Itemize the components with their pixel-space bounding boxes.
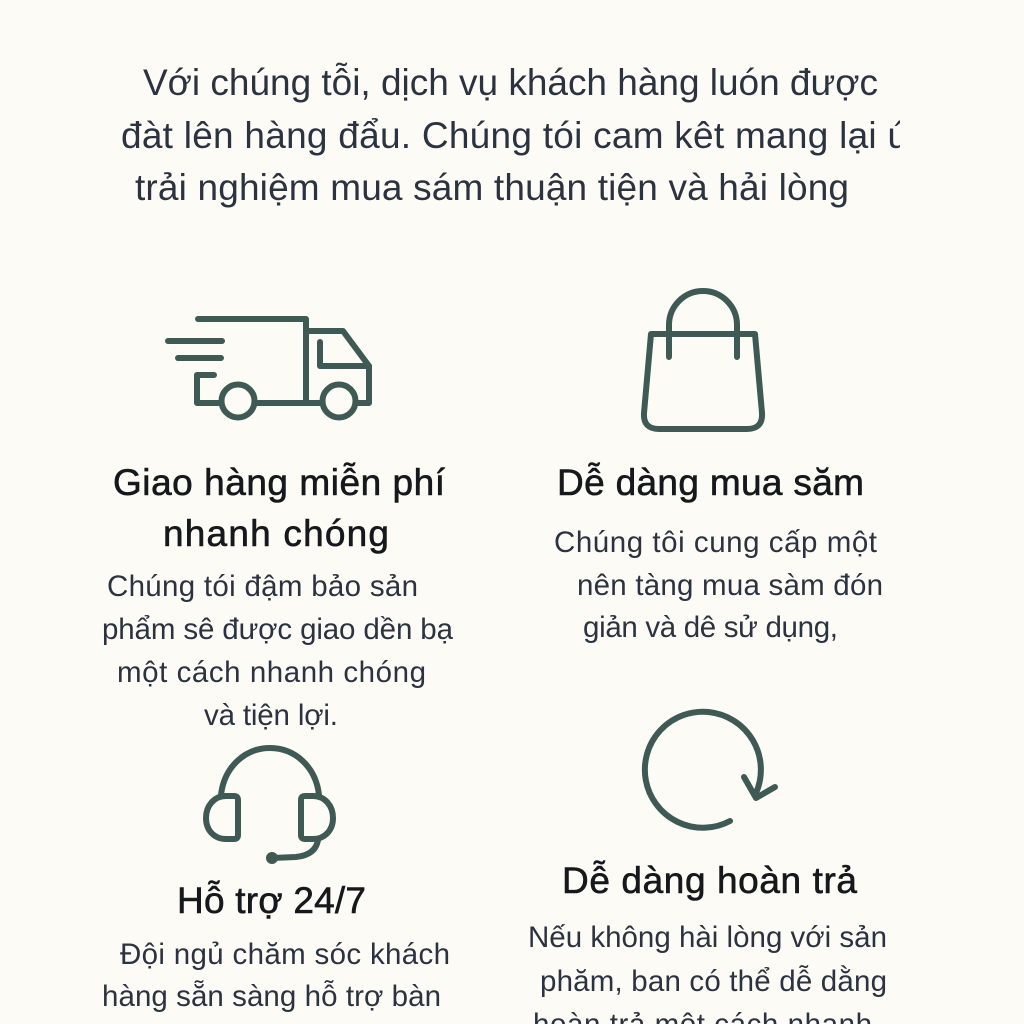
panel: 24/7 support <box>102 748 450 1013</box>
icon: delivery truck <box>168 319 369 418</box>
text: returns description <box>528 921 887 1024</box>
text: delivery description: một cách nhanh chóng <box>117 656 426 689</box>
icon: shopping bag <box>644 291 762 429</box>
heading: easy returns: Dễ dàng hoàn trả <box>562 860 857 901</box>
text: shopping description: nên tàng mua sàm đón <box>577 569 883 602</box>
icon: circular return arrow <box>645 712 775 828</box>
text: delivery description: và tiện lợi. <box>204 699 338 732</box>
panel: free fast delivery <box>102 319 454 732</box>
text: shopping description: giản và dê sử dụng, <box>583 611 838 644</box>
heading: 24/7 support: Hỗ trợ 24/7 <box>177 880 366 921</box>
text: support description: Đội ngủ chăm sóc khách <box>120 938 450 971</box>
text: support description <box>102 938 450 1013</box>
text: returns description: Nếu không hài lòng với sản <box>528 921 887 954</box>
text: delivery description: phẩm sê được giao dền bạ <box>102 613 454 646</box>
text: returns description: phăm, ban có thể dễ dằng <box>540 965 887 998</box>
panel: easy returns <box>528 712 887 1024</box>
icon: headset <box>206 748 333 861</box>
panel: easy shopping <box>554 291 883 644</box>
heading: free fast delivery: nhanh chóng <box>163 513 389 554</box>
text: delivery description <box>102 570 454 732</box>
heading: easy shopping: Dễ dàng mua săm <box>557 462 864 503</box>
intro text block: trải nghiệm mua sám thuận tiện và hải lòng <box>135 167 849 208</box>
heading: free fast delivery: Giao hàng miễn phí <box>113 462 446 503</box>
intro text block: đàt lên hàng đẩu. Chúng tói cam kêt mang lại ú <box>121 115 908 156</box>
text: shopping description <box>554 526 883 644</box>
heading: free fast delivery <box>113 462 446 554</box>
intro text block <box>121 62 908 208</box>
text: support description: hàng sẵn sàng hỗ trợ bàn <box>102 980 441 1013</box>
text: delivery description: Chúng tói đậm bảo sản <box>107 570 418 603</box>
intro text block: Với chúng tỗi, dịch vụ khách hàng luón được <box>143 62 878 103</box>
text: shopping description: Chúng tôi cung cấp một <box>554 526 877 559</box>
